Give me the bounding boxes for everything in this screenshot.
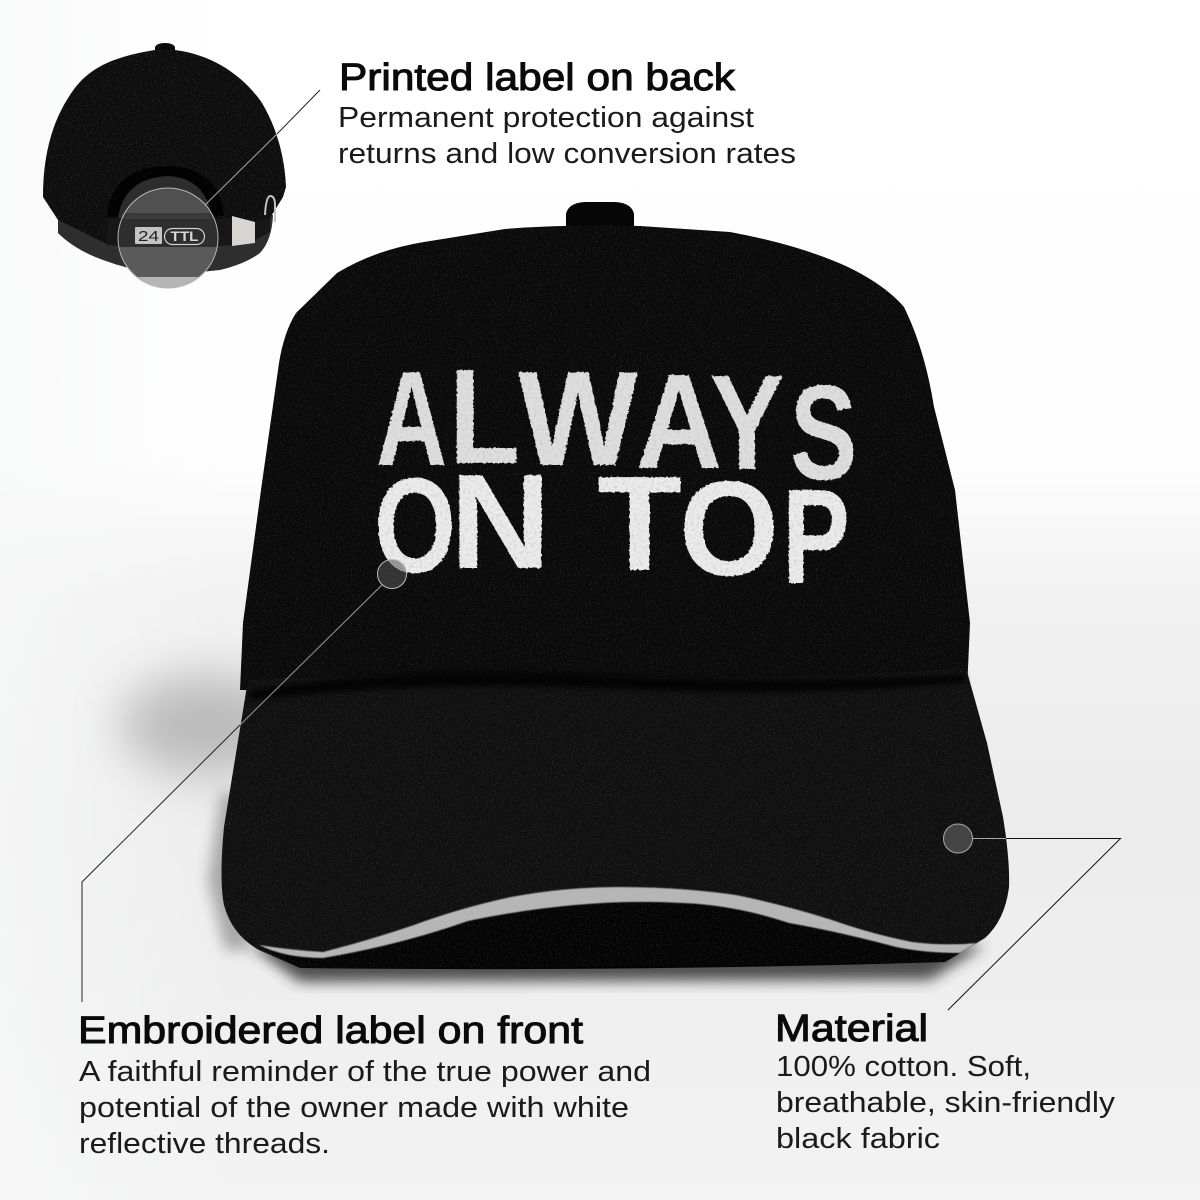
back cap gloss band	[58, 215, 273, 273]
description: embroidered label: potential of the owner made with white	[79, 1092, 629, 1124]
embroidered text: ALWAYS ON TOP: O	[679, 453, 779, 604]
callout dot and leader: material	[944, 824, 1120, 1010]
description: material: breathable, skin-friendly	[776, 1087, 1116, 1119]
embroidered text: ALWAYS ON TOP: A	[636, 346, 722, 497]
label: TTL: TTL	[170, 228, 199, 244]
magnifier lens	[118, 188, 218, 288]
back cap crown	[43, 50, 286, 245]
cap brim	[222, 668, 1009, 968]
description: embroidered label: A faithful reminder of the true power and	[79, 1056, 651, 1088]
text block: embroidered label on front	[78, 1010, 651, 1160]
embroidered text: ALWAYS ON TOP: P	[782, 461, 850, 612]
main cap, front view	[222, 202, 1009, 969]
heading: embroidered label: Embroidered label on front	[78, 1010, 583, 1052]
leader line: back label	[205, 90, 320, 205]
description: embroidered label	[79, 1056, 651, 1160]
text block: printed label on back	[338, 57, 796, 170]
cap crown	[240, 225, 970, 690]
fabric weave	[222, 225, 1009, 968]
description: printed label	[338, 102, 796, 170]
description: printed label: Permanent protection against	[338, 102, 754, 134]
embroidered text: ALWAYS ON TOP: T	[597, 448, 682, 599]
embroidered text: ALWAYS ON TOP	[374, 341, 857, 612]
white sandwich stripe	[259, 887, 977, 958]
back cap buckle	[232, 216, 255, 246]
back cap button	[155, 43, 175, 53]
embroidered text: ALWAYS ON TOP: S	[790, 357, 857, 508]
embroidered text: ALWAYS ON TOP: L	[449, 341, 520, 492]
label: 24: 24	[138, 228, 159, 245]
brim underside	[259, 888, 977, 969]
description: material	[776, 1051, 1116, 1155]
brim seam	[250, 672, 966, 700]
back view cap inset	[43, 43, 286, 292]
text block: material	[775, 1008, 1116, 1155]
heading: material: Material	[775, 1008, 928, 1050]
description: material: black fabric	[776, 1123, 940, 1155]
description: embroidered label: reflective threads.	[79, 1128, 330, 1160]
embroidered text: ALWAYS ON TOP: W	[518, 343, 639, 494]
cap shadow	[120, 675, 985, 982]
embroidered text: ALWAYS ON TOP: N	[450, 446, 551, 597]
embroidered text: ALWAYS ON TOP: O	[374, 450, 456, 601]
description: material: 100% cotton. Soft,	[776, 1051, 1031, 1083]
back cap loop	[265, 196, 275, 222]
heading: printed label: Printed label on back	[339, 57, 736, 99]
back cap opening	[107, 166, 224, 218]
description: printed label: returns and low conversion rates	[338, 138, 796, 170]
embroidered text: ALWAYS ON TOP: Y	[710, 347, 784, 498]
cap button	[566, 202, 634, 232]
back cap strap	[107, 217, 270, 248]
embroidered text: ALWAYS ON TOP: A	[376, 343, 447, 494]
callout dot and leader: front label	[82, 560, 406, 1002]
